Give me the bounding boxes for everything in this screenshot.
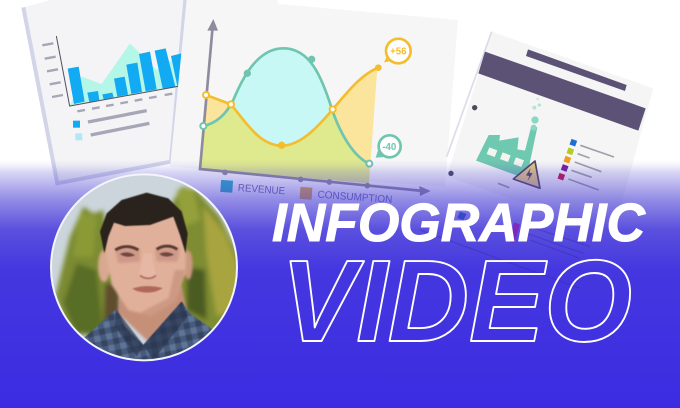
eyes [120, 252, 174, 257]
sky [52, 176, 235, 346]
header band [478, 52, 646, 131]
trees [55, 187, 240, 337]
revenue line [203, 48, 369, 164]
legend: revenue: REVENUE [237, 183, 286, 197]
legend colour squares [557, 139, 577, 181]
badge: -40 [376, 135, 401, 158]
nose [139, 254, 156, 278]
icon: warning triangle [513, 161, 540, 188]
heading: VIDEO outlined: VIDEO [281, 236, 632, 366]
icon: factory [476, 98, 541, 177]
ears [98, 250, 110, 282]
data points [200, 57, 381, 167]
gradient overlay [0, 160, 680, 408]
shirt [84, 301, 212, 360]
mouth [132, 286, 163, 293]
panel: factory infographic card [447, 32, 653, 233]
legend lines [498, 145, 614, 190]
legend: revenue [220, 180, 286, 197]
consumption line [206, 68, 378, 146]
face [105, 213, 186, 316]
neck [118, 287, 187, 343]
hair [100, 193, 188, 253]
badge: +56 [384, 39, 411, 63]
consumption area [201, 68, 377, 183]
brows [115, 246, 177, 250]
badge: -40: -40 [382, 142, 396, 153]
axis ticks [225, 172, 367, 186]
portrait photo [50, 174, 238, 362]
badge: +56: +56 [390, 46, 407, 57]
ghost card detail behind title [420, 212, 590, 288]
revenue lobe [231, 48, 333, 146]
eye shadow [115, 248, 180, 263]
jaw shadow [140, 270, 185, 316]
panel: line chart card [170, 0, 458, 206]
title bar [526, 49, 627, 91]
legend: consumption: CONSUMPTION [317, 190, 393, 206]
portrait ring [51, 174, 237, 360]
axes [200, 27, 423, 191]
revenue area [202, 108, 370, 183]
heading: INFOGRAPHIC: INFOGRAPHIC [272, 193, 646, 253]
panel: bar chart card [23, 0, 185, 183]
legend: consumption [300, 187, 393, 206]
